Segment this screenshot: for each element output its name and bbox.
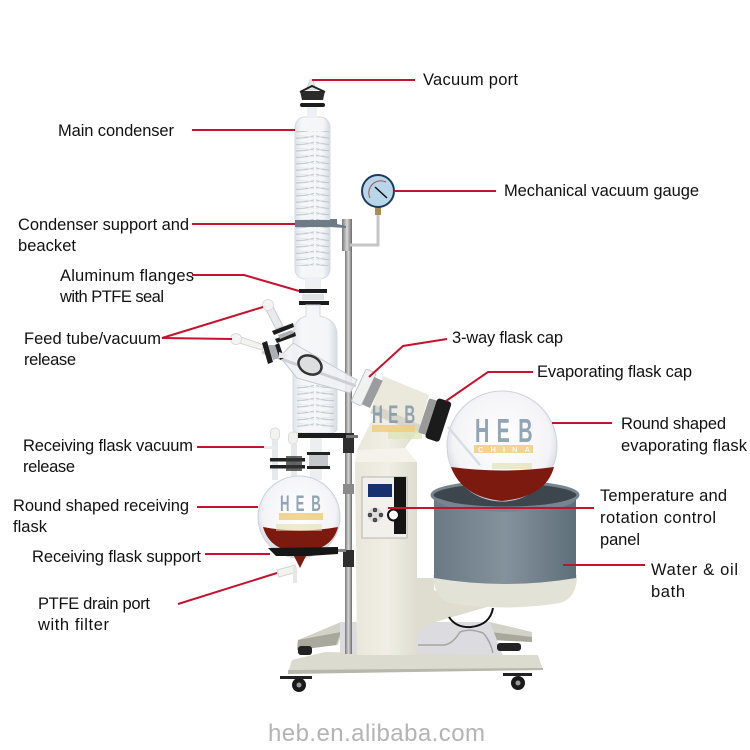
label: Main condenser: Main condenser	[58, 122, 174, 140]
label: Round shaped evaporating flask: evaporating flask	[621, 437, 748, 455]
top vacuum port and flange	[300, 80, 325, 107]
label: Aluminum flanges: with PTFE seal	[59, 288, 164, 306]
evaporating flask	[447, 391, 557, 501]
label: Round shaped receiving flask	[13, 497, 189, 536]
leader: Temperature and rotation control panel	[388, 507, 594, 509]
vapor duct cap	[351, 369, 384, 410]
watermark on evaporating flask: HEB	[475, 412, 533, 449]
label: Feed tube/vacuum release: Feed tube/vacuum	[24, 330, 161, 348]
vacuum gauge and stem	[350, 175, 394, 245]
receiving flask support ring	[268, 547, 346, 556]
label: Receiving flask support: Receiving flask support	[32, 548, 201, 566]
leader: Round shaped receiving flask	[197, 506, 258, 508]
label: Receiving flask vacuum release: release	[23, 458, 75, 476]
keypad buttons	[368, 508, 383, 522]
label: Feed tube/vacuum release: release	[24, 351, 76, 369]
watermark on head: HEB	[372, 401, 415, 429]
aluminum flanges	[299, 289, 329, 305]
label: Condenser support and bracket: Condenser support and	[18, 216, 189, 234]
control panel	[362, 477, 407, 538]
vapor duct glass bulb	[262, 343, 357, 393]
leader: Main condenser	[192, 129, 295, 131]
leader: PTFE drain port	[178, 573, 277, 604]
receiving flask connectors	[264, 428, 330, 489]
label: Round shaped receiving flask: Round shaped receiving	[13, 497, 189, 515]
leader: Receiving flask vacuum release	[197, 446, 264, 448]
drain port with tap	[277, 556, 306, 583]
label: Condenser support and bracket: beacket	[18, 237, 76, 255]
leader: Aluminum flanges	[192, 275, 299, 291]
round receiving flask	[258, 476, 340, 558]
label: PTFE drain port with filter: PTFE drain port	[38, 595, 150, 613]
machine base with casters	[280, 622, 543, 692]
label: Temperature and rotation control panel: panel	[600, 531, 640, 549]
leader: 3-way flask cap	[369, 339, 447, 377]
label: Round shaped receiving flask: flask	[13, 518, 48, 536]
label: Temperature and rotation control panel: Temperature and	[600, 487, 727, 505]
watermark on receiving flask: HEB	[280, 492, 321, 516]
evaporating flask cap	[417, 395, 452, 442]
label: Feed tube/vacuum release	[24, 330, 161, 369]
label: Aluminum flanges: Aluminum flanges	[60, 267, 194, 285]
label: Temperature and rotation control panel	[600, 487, 727, 549]
label: Round shaped evaporating flask	[621, 415, 748, 455]
label: Water and oil bath: bath	[651, 583, 685, 601]
label: Temperature and rotation control panel: rotation control	[600, 509, 716, 527]
feed tube and vacuum release valves	[230, 300, 296, 364]
leader: Feed tube/vacuum release	[162, 307, 263, 339]
label: Water and oil bath: Water & oil	[651, 561, 738, 579]
label: Vacuum port: Vacuum port	[423, 71, 518, 89]
label: 3-way flask cap: 3-way flask cap	[452, 329, 563, 347]
water and oil bath	[432, 482, 578, 608]
footer website watermark: heb.en.alibaba.com	[268, 720, 485, 747]
bath front rim over flask	[437, 498, 575, 512]
label: Evaporating flask cap: Evaporating flask cap	[537, 363, 692, 381]
lower condenser glass	[293, 305, 337, 433]
label: Water and oil bath	[651, 561, 738, 601]
label: Round shaped evaporating flask: Round shaped	[621, 415, 726, 433]
cream control column	[355, 410, 420, 655]
label: Mechanical vacuum gauge: Mechanical vacuum gauge	[504, 182, 699, 200]
label: Receiving flask vacuum release: Receiving flask vacuum	[23, 437, 193, 455]
rotary knob	[388, 510, 399, 520]
label: PTFE drain port with filter: with filter	[37, 616, 110, 634]
condenser support bracket	[295, 219, 346, 228]
display screen	[368, 484, 392, 497]
leader: Evaporating flask cap	[446, 372, 533, 401]
upper condenser glass	[295, 106, 330, 291]
label: Condenser support and bracket	[18, 216, 189, 255]
rotation head housing	[370, 376, 429, 439]
label: PTFE drain port with filter	[37, 595, 150, 634]
vertical support pole	[342, 219, 354, 654]
leader: Round shaped evaporating flask	[552, 422, 612, 424]
lower condenser clamp	[298, 433, 358, 438]
watermark on evaporating flask: CHINA	[478, 445, 531, 454]
label: Aluminum flanges	[59, 267, 194, 306]
label: Receiving flask vacuum release	[23, 437, 193, 476]
leader: Vacuum port	[312, 79, 415, 81]
leader: Condenser support	[192, 223, 295, 225]
leader: Receiving flask support	[205, 553, 270, 555]
leader: Water and oil bath	[563, 564, 645, 566]
support arm and power cable	[417, 578, 493, 633]
leader: Mechanical vacuum gauge	[394, 190, 496, 192]
